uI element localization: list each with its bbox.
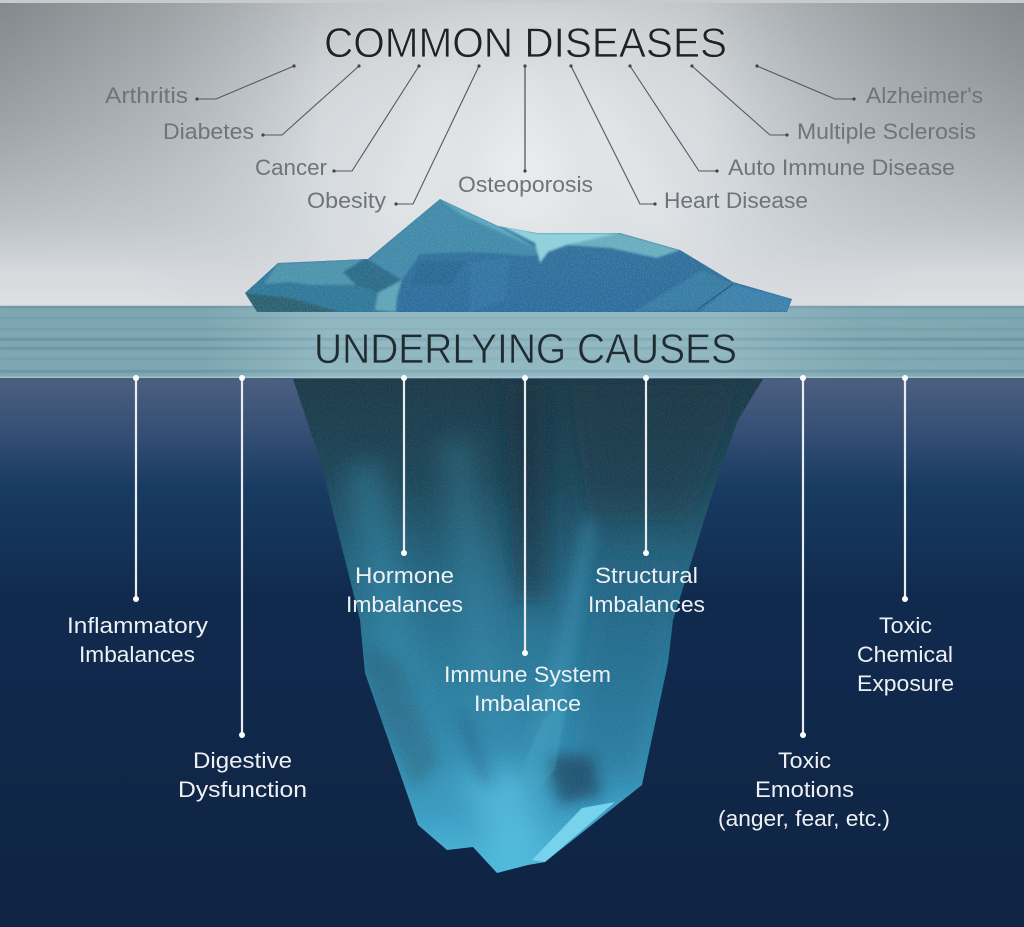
disease: Obesity [307,64,481,213]
disease: Diabetes: Diabetes [163,119,254,144]
water band [0,306,1024,378]
cause: Inflammatory Imbalances [67,375,208,667]
disease: Heart Disease: Heart Disease [664,188,808,213]
disease: Alzheimer's [755,64,983,108]
cause: Toxic Emotions: (anger, fear, etc.) [718,806,890,831]
deep ocean [0,378,1024,927]
disease: Arthritis [105,64,296,108]
cause: Toxic Chemical Exposure: Exposure [857,671,954,696]
cause: Immune System Imbalance [444,375,611,716]
cause: Hormone Imbalances [346,375,463,617]
disease: Obesity: Obesity [307,188,386,213]
cause: Immune System Imbalance: Immune System [444,662,611,687]
cause: Inflammatory Imbalances: Inflammatory [67,613,208,638]
cause: Inflammatory Imbalances: Imbalances [79,642,195,667]
disease: Cancer: Cancer [255,155,327,180]
disease: Heart Disease [569,64,808,213]
disease: Multiple Sclerosis [690,64,976,144]
disease: Multiple Sclerosis: Multiple Sclerosis [797,119,976,144]
cause: Digestive Dysfunction [178,375,307,802]
cause: Toxic Chemical Exposure [857,375,954,696]
iceberg above water [240,195,800,315]
disease: Arthritis: Arthritis [105,83,188,108]
cause: Structural Imbalances: Imbalances [588,592,705,617]
disease: Osteoporosis: Osteoporosis [458,172,593,197]
cause: Structural Imbalances: Structural [595,563,698,588]
disease: Cancer [255,64,421,180]
cause: Toxic Chemical Exposure: Chemical [857,642,953,667]
title: common diseases: COMMON DISEASES [324,19,727,66]
cause: Toxic Emotions: Toxic [778,748,831,773]
cause: Toxic Emotions: Emotions [755,777,854,802]
cause: Immune System Imbalance: Imbalance [474,691,581,716]
cause: Digestive Dysfunction: Digestive [193,748,292,773]
disease: Diabetes [163,64,361,144]
iceberg below water [285,375,775,875]
cause: Hormone Imbalances: Imbalances [346,592,463,617]
cause: Toxic Chemical Exposure: Toxic [879,613,932,638]
cause: Digestive Dysfunction: Dysfunction [178,777,307,802]
disease: Auto Immune Disease: Auto Immune Disease [728,155,955,180]
heading: underlying causes: UNDERLYING CAUSES [314,325,737,372]
disease: Alzheimer's: Alzheimer's [866,83,983,108]
disease: Osteoporosis [458,64,593,197]
cause: Toxic Emotions [718,375,890,831]
cause: Structural Imbalances [588,375,705,617]
sky background [0,0,1024,310]
disease: Auto Immune Disease [628,64,955,180]
cause: Hormone Imbalances: Hormone [355,563,454,588]
